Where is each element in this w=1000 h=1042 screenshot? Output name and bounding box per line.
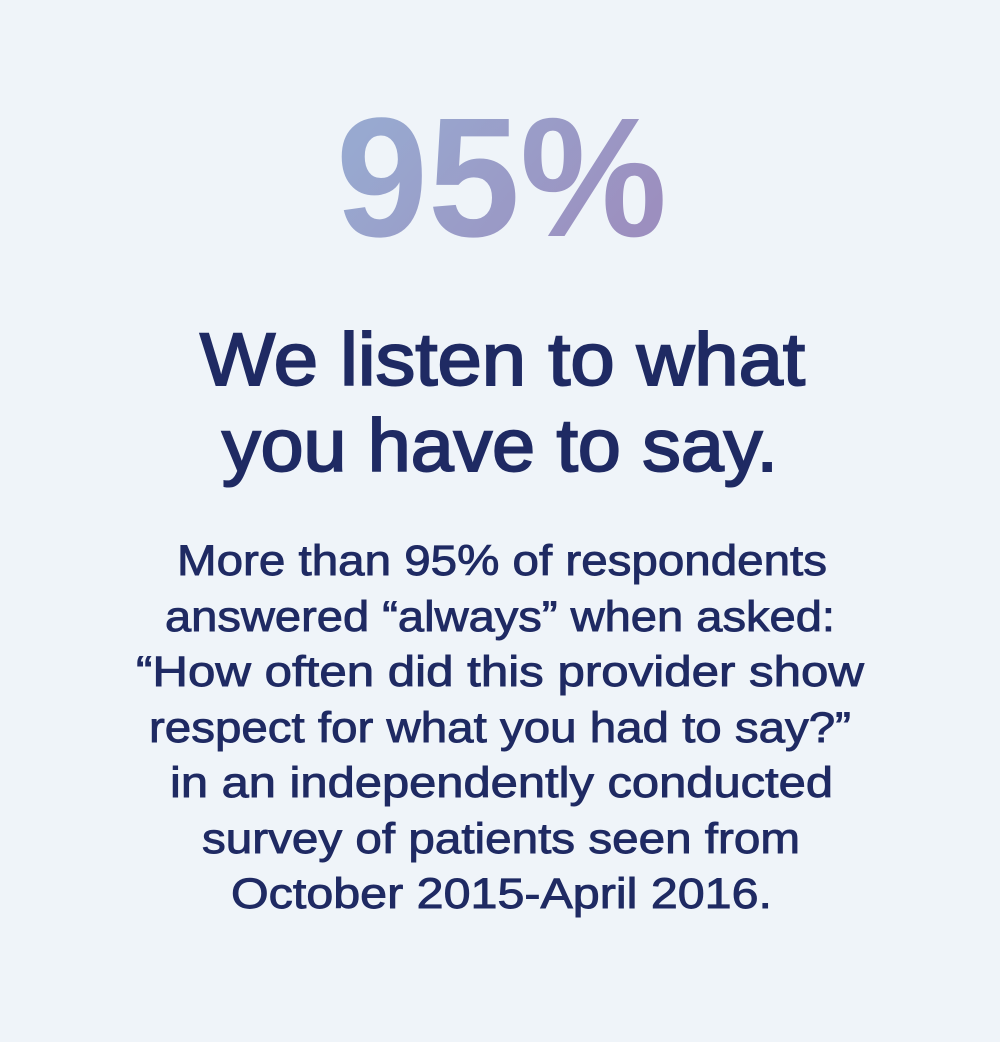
body text: in an independently conducted bbox=[170, 759, 833, 807]
body text bbox=[136, 537, 865, 918]
body text: “How often did this provider show bbox=[136, 648, 865, 696]
body text: answered “always” when asked: bbox=[165, 593, 835, 641]
body text: survey of patients seen from bbox=[202, 815, 800, 863]
heading: We listen to what bbox=[200, 318, 805, 401]
body text: More than 95% of respondents bbox=[177, 537, 827, 585]
body text: October 2015-April 2016. bbox=[231, 870, 772, 918]
heading: you have to say. bbox=[222, 404, 778, 487]
big statistic: 95%: 95% bbox=[336, 83, 667, 273]
body text: respect for what you had to say?” bbox=[149, 704, 851, 752]
heading bbox=[200, 318, 805, 487]
